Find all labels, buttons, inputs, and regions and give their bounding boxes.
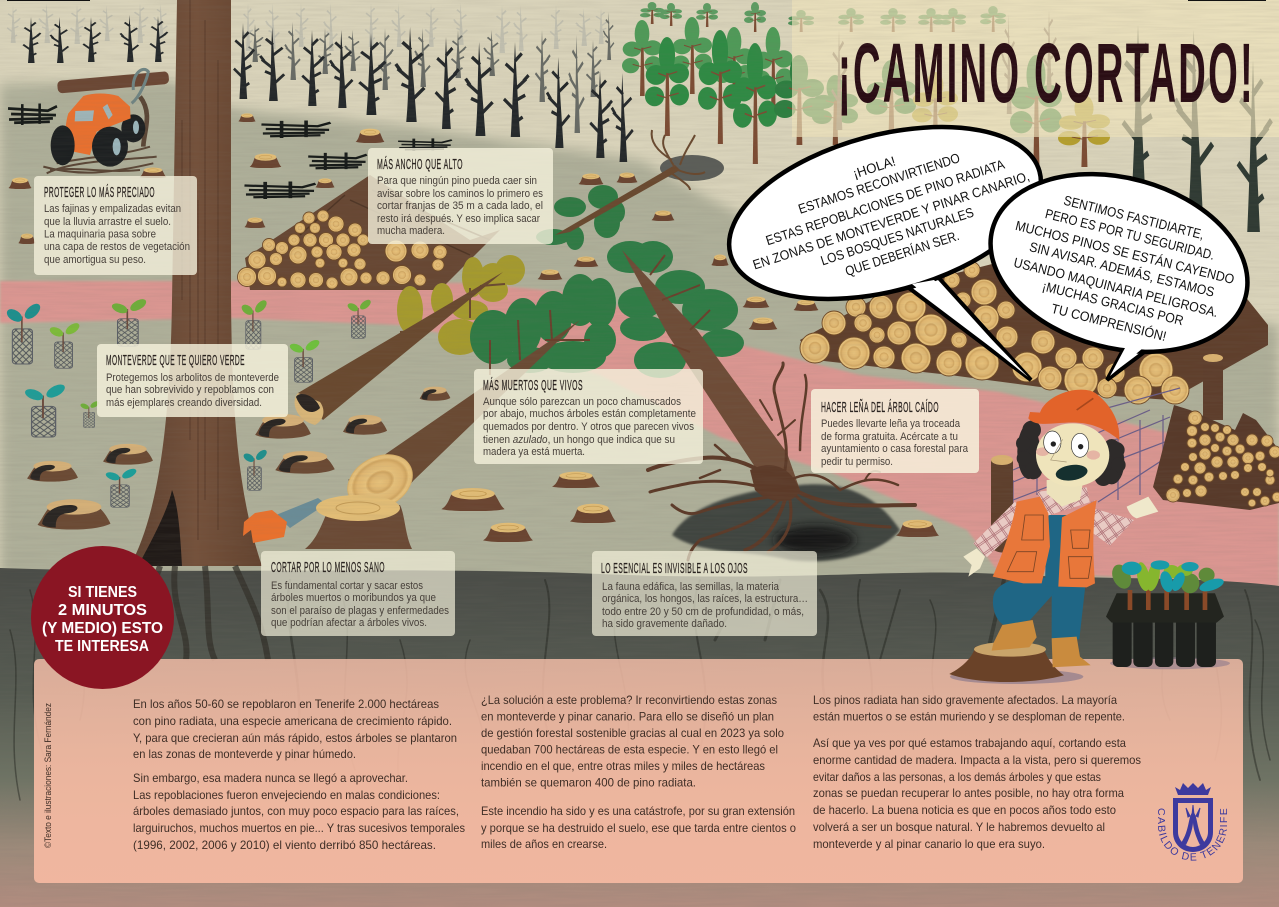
text column 2: miles de años en crearse. — [481, 838, 607, 851]
speech bubble: hola: EN ZONAS DE MONTEVERDE Y PINAR CANARIO, — [751, 169, 1031, 272]
credit line: ©Texto e ilustraciones: Sara Fernández — [43, 703, 54, 848]
panel: lo esencial es invisible a los ojos: La fauna edáfica, las semillas, la materia — [602, 581, 780, 593]
left log pile — [238, 175, 500, 290]
speech bubble: hola: ¡HOLA! — [851, 154, 897, 181]
panel: más ancho que alto: avisar sobre los caminos lo primero es — [377, 188, 543, 200]
panel: proteger lo más preciado: que amortigua su peso. — [44, 254, 146, 266]
panel: cortar por lo menos sano: que podrían afectar a árboles vivos. — [271, 617, 427, 629]
text column 3: Así que ya ves por qué estamos trabajando aquí, cortando esta — [813, 737, 1126, 750]
logo: cabildo de tenerife: CABILDO DE TENERIFE — [1158, 808, 1227, 861]
panel: monteverde que te quiero verde: que han sobrevivido y repoblamos con — [106, 384, 274, 396]
speech bubble: hola: ESTAS REPOBLACIONES DE PINO RADIATA — [764, 157, 1006, 248]
text column 3: zonas se puedan recuperar lo antes posible, no hay otra forma — [813, 787, 1124, 800]
text column 2: incendio en el que, entre otras miles y miles de hectáreas — [481, 760, 765, 773]
badge: si tienes 2 minutos: TE INTERESA — [55, 638, 149, 655]
panel: más ancho que alto: cortar franjas de 35 m a cada lado, el — [377, 200, 543, 212]
panel: más muertos que vivos: madera ya está muerta. — [483, 446, 585, 458]
panel: lo esencial es invisible a los ojos: LO ESENCIAL ES INVISIBLE A LOS OJOS — [601, 560, 748, 577]
text column 1: Y, para que crecieran aún más rápido, estos árboles se plantaron — [133, 732, 457, 745]
title backing panel — [792, 0, 1279, 137]
badge: si tienes 2 minutos — [31, 546, 174, 689]
panel: hacer leña del árbol caído: pedir tu permiso. — [821, 456, 893, 468]
text column 3 — [813, 694, 1141, 851]
fence bundles — [8, 104, 452, 199]
panel: lo esencial es invisible a los ojos: orgánica, los hongos, las raíces, la estructura… — [602, 593, 808, 605]
speech bubble: hola: LOS BOSQUES NATURALES — [819, 205, 976, 268]
speech bubble: hola: ESTAMOS RECONVIRTIENDO — [796, 150, 962, 217]
seedlings in cages — [4, 297, 373, 507]
text column 1: Sin embargo, esa madera nunca se llegó a aprovechar. — [133, 772, 408, 785]
text column 3: están muertos o se están muriendo y se desploman de repente. — [813, 710, 1125, 724]
badge: si tienes 2 minutos: (Y MEDIO) ESTO — [42, 620, 163, 637]
speech bubble: sentimos: SIN AVISAR. ADEMÁS, ESTAMOS — [1028, 239, 1216, 300]
print crop marks — [7, 0, 1266, 2]
panel: lo esencial es invisible a los ojos: ha sido gravemente dañado. — [602, 618, 727, 630]
panel: hacer leña del árbol caído: ayuntamiento o casa forestal para — [821, 443, 969, 455]
panel: proteger lo más preciado — [34, 176, 197, 275]
text column 2: Este incendio ha sido y es una catástrofe, por su gran extensión — [481, 805, 795, 818]
panel: cortar por lo menos sano: son el paraíso de plagas y enfermedades — [271, 605, 449, 617]
panel: cortar por lo menos sano: árboles muertos o moribundos ya que — [271, 592, 436, 604]
text column 1: Las repoblaciones fueron envejeciendo en malas condiciones: — [133, 789, 440, 802]
panel: proteger lo más preciado: Las fajinas y empalizadas evitan — [44, 203, 181, 215]
badge: si tienes 2 minutos: 2 MINUTOS — [58, 602, 147, 619]
speech bubble: sentimos: USANDO MAQUINARIA PELIGROSA. — [1012, 255, 1220, 320]
panel: más muertos que vivos: quemados por dentro. Y otros que parecen vivos — [483, 421, 694, 433]
panel: proteger lo más preciado: que la lluvia arrastre el suelo. — [44, 216, 171, 228]
panel: más ancho que alto: Para que ningún pino pueda caer sin — [377, 175, 537, 187]
panel: monteverde que te quiero verde: más ejemplares creando diversidad. — [106, 397, 262, 409]
text column 1: con pino radiata, una especie americana de crecimiento rápido. — [133, 715, 452, 728]
speech bubble: sentimos: PERO ES POR TU SEGURIDAD. — [1044, 206, 1216, 263]
panel: más muertos que vivos: tienen azulado, un hongo que indica que su — [483, 434, 675, 446]
chainsaw — [243, 498, 326, 543]
panel: cortar por lo menos sano: Es fundamental cortar y sacar estos — [271, 580, 423, 592]
badge: si tienes 2 minutos: SI TIENES — [68, 584, 137, 601]
text column 3: evitar daños a las personas, a los demás árboles y que estas — [813, 771, 1101, 784]
speech bubble: hola: QUE DEBERÍAN SER. — [843, 228, 961, 279]
text column 1: larguiruchos, muchos muertos en pie... Y tras sucesivos temporales — [133, 822, 465, 835]
speech bubble: sentimos: ¡MUCHAS GRACIAS POR — [1041, 279, 1185, 328]
text column 3: enorme cantidad de madera. Impacta a la vista, pero si queremos — [813, 754, 1141, 767]
text column 1: en las zonas de monteverde y pinar húmedo. — [133, 748, 356, 761]
fallen tree with cut trunk — [338, 274, 616, 520]
fallen yellow tree — [295, 255, 525, 425]
text column 1: (1996, 2002, 2006 y 2010) el viento derribó 850 hectáreas. — [133, 839, 436, 852]
panel: más ancho que alto — [368, 148, 553, 244]
text column 1 — [133, 698, 465, 852]
panel: hacer leña del árbol caído — [811, 389, 979, 473]
panel: lo esencial es invisible a los ojos: todo entre 20 y 50 cm de profundidad, o más, — [602, 606, 804, 618]
text column 2: quedaban 700 hectáreas de esta especie. Y en esto llegó el — [481, 744, 778, 756]
panel: más ancho que alto: resto irá después. Y eso implica sacar — [377, 213, 540, 225]
panel: proteger lo más preciado: PROTEGER LO MÁS PRECIADO — [44, 184, 155, 201]
text column 2: también se quemaron 400 de pino radiata. — [481, 776, 696, 790]
text column 2: ¿La solución a este problema? Ir reconvirtiendo estas zonas — [481, 694, 777, 707]
panel: monteverde que te quiero verde — [97, 344, 288, 417]
big foreground trunk — [128, 0, 268, 660]
panel: proteger lo más preciado: una capa de restos de vegetación — [44, 241, 190, 253]
wire fence — [1013, 388, 1180, 503]
speech bubble: sentimos — [970, 147, 1268, 380]
panel: hacer leña del árbol caído: Puedes llevarte leña ya troceada — [821, 418, 961, 430]
mid grey burnt trees — [248, 12, 614, 133]
right side trees behind title — [774, 6, 1271, 232]
speech bubble: sentimos: TU COMPRENSIÓN! — [1050, 301, 1168, 344]
uprooted tree with hole and roots — [607, 241, 915, 561]
text column 3: volverá a ser un bosque natural. Y le habremos devuelto al — [813, 821, 1105, 834]
panel: monteverde que te quiero verde: MONTEVERDE QUE TE QUIERO VERDE — [106, 352, 245, 369]
text column 3: Los pinos radiata han sido gravemente afectados. La mayoría — [813, 694, 1117, 707]
soil roots — [10, 575, 1270, 800]
panel: monteverde que te quiero verde: Protegemos los arbolitos de monteverde — [106, 372, 279, 384]
top centre fallen tree and hole — [536, 130, 724, 250]
panel: más muertos que vivos: por abajo, muchos árboles están completamente — [483, 408, 696, 420]
panel: más ancho que alto: mucha madera. — [377, 225, 445, 237]
character with tree stump — [949, 390, 1158, 684]
text column 1: árboles demasiado juntos, con muy poco espacio para las raíces, — [133, 805, 459, 818]
seedling tray — [1106, 560, 1230, 669]
panel: más muertos que vivos: Aunque sólo parezcan un poco chamuscados — [483, 396, 681, 408]
text column 2 — [481, 694, 796, 851]
panel: cortar por lo menos sano: CORTAR POR LO MENOS SANO — [271, 559, 385, 576]
speech bubble: sentimos: SENTIMOS FASTIDIARTE, — [1062, 193, 1206, 242]
speech bubble: hola — [710, 96, 1060, 380]
stumps on ground — [8, 113, 939, 542]
small dark log stack — [1153, 405, 1279, 510]
ghost trees far background — [7, 3, 608, 53]
panel: hacer leña del árbol caído: HACER LEÑA DEL ÁRBOL CAÍDO — [821, 399, 939, 416]
panel: lo esencial es invisible a los ojos — [592, 551, 817, 636]
text column 2: de gestión forestal sostenible gracias al cual en 2023 ya solo — [481, 727, 784, 740]
panel: más muertos que vivos — [474, 369, 703, 464]
burnt trees foreground row — [23, 15, 633, 162]
tractor with log — [43, 69, 169, 173]
cut stump front — [305, 495, 412, 549]
text column 3: de hacerlo. La buena noticia es que en pocos años todo esto — [813, 804, 1116, 817]
panel: más muertos que vivos: MÁS MUERTOS QUE VIVOS — [483, 377, 583, 394]
green trees — [622, 2, 793, 164]
text column 2: en monteverde y pinar canario. Para ello se diseñó un plan — [481, 710, 774, 724]
post stump behind character — [991, 455, 1013, 553]
panel: más ancho que alto: MÁS ANCHO QUE ALTO — [377, 156, 463, 173]
panel: hacer leña del árbol caído: de forma gratuita. Acércate a tu — [821, 431, 958, 443]
logo: cabildo de tenerife — [1158, 783, 1227, 861]
panel: proteger lo más preciado: La maquinaria pasa sobre — [44, 228, 156, 240]
speech bubble: sentimos: MUCHOS PINOS SE ESTÁN CAYENDO — [1014, 218, 1236, 287]
text column 3: monteverde y al pinar canario lo que era suyo. — [813, 838, 1045, 851]
text column 1: En los años 50-60 se repoblaron en Tenerife 2.000 hectáreas — [133, 698, 439, 711]
text panel: main explanation — [34, 659, 1243, 883]
panel: cortar por lo menos sano — [261, 551, 455, 636]
text column 2: y porque se ha destruido el suelo, ese que tarda entre cientos o — [481, 822, 796, 835]
right log pile — [800, 262, 1268, 420]
